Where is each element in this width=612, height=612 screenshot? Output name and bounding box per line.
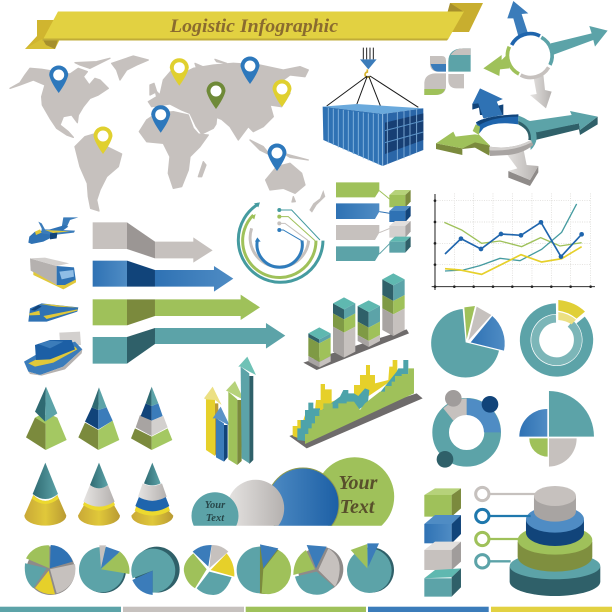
label ring: blue (476, 509, 531, 523)
series: yellow (293, 360, 397, 440)
label: teal (336, 237, 411, 261)
quadrant chart (519, 391, 594, 467)
dot: gray (445, 390, 462, 407)
series: blue (445, 220, 584, 259)
exploded pie chart (431, 306, 505, 378)
map islands: japan (309, 190, 325, 213)
pie 1 (25, 545, 76, 595)
ring labels and stacked cylinder (476, 486, 600, 596)
arrow: 3D teal (518, 111, 598, 140)
concentric arc chart (238, 202, 323, 282)
bubble: teal: Your (205, 500, 226, 511)
pin: russia (240, 56, 260, 84)
dot: dark teal (437, 451, 453, 468)
arrow: 3D blue (472, 88, 503, 118)
tier: green (518, 525, 592, 572)
label ring: gray (476, 487, 537, 501)
pin: oceania (268, 144, 286, 171)
label: gray (336, 221, 411, 240)
pin: europe (170, 58, 189, 86)
cone 2 (78, 463, 120, 526)
icon: train (28, 303, 78, 322)
ring segments (473, 114, 537, 156)
arrow: gray (93, 222, 213, 263)
icon: petals (424, 48, 471, 95)
bar 3 (358, 300, 380, 347)
tier: blue (526, 506, 584, 546)
series: green (444, 222, 582, 247)
small 3D pies row, right (293, 543, 394, 595)
bubble: teal: Text (206, 513, 225, 524)
cube: gray (424, 542, 461, 570)
tier: gray (534, 486, 576, 522)
bar 1 (308, 327, 331, 367)
bubble: blue (272, 468, 340, 526)
pie 5 (237, 544, 291, 594)
world map (10, 56, 308, 211)
map pins (49, 56, 292, 171)
bubble: green (322, 457, 394, 526)
arrow: blue (213, 407, 230, 462)
label: blue (336, 203, 411, 222)
bar 2 (333, 297, 355, 358)
icon: container on crane hook (323, 48, 423, 166)
arc: teal (238, 202, 323, 282)
pie 3 (131, 547, 180, 595)
rising 3D arrows (204, 357, 256, 465)
arrow: green (226, 381, 244, 465)
bubble: green: Text (340, 496, 376, 518)
pin: central asia (206, 82, 226, 109)
series: green (305, 368, 414, 444)
arc: green (243, 214, 316, 278)
tier: bottom teal (510, 553, 600, 596)
label ring: green (476, 532, 519, 546)
bar 4 (382, 273, 405, 336)
stepped area chart (289, 360, 423, 448)
cone 3 (131, 463, 173, 526)
cone 1 (24, 463, 66, 526)
icon: ship (24, 332, 82, 376)
pyramid 2 (78, 387, 119, 450)
arrow: 3D green (436, 132, 490, 156)
isometric bar chart (303, 273, 409, 370)
arrow: gray down (530, 74, 552, 108)
arrow: blue up (507, 1, 528, 36)
pie 6 (293, 545, 343, 595)
text bubbles (192, 457, 394, 526)
pin: east asia (272, 80, 292, 107)
double ring chart (525, 300, 588, 371)
stepped arrows (93, 222, 285, 364)
cube: teal (424, 568, 461, 597)
label: green (336, 182, 411, 207)
stacked cubes (424, 488, 461, 597)
3D ring with four arrows (436, 88, 598, 186)
label boxes with cubes (336, 182, 411, 261)
bottom colour bar (0, 607, 612, 612)
line chart (432, 193, 595, 290)
series: teal (445, 204, 577, 271)
pin: africa (151, 105, 170, 133)
pin: north america (49, 66, 68, 93)
pie 7 (347, 543, 394, 593)
cones (24, 463, 173, 526)
arrow: yellow (204, 387, 222, 456)
arc: blue (255, 228, 302, 267)
arrow: teal (238, 357, 256, 464)
dot: dark blue (482, 396, 498, 413)
donut with dots (437, 390, 501, 468)
cube: green (424, 488, 461, 517)
small 3D pies row (25, 544, 291, 595)
arrow: teal (93, 323, 285, 364)
arrow: green left (483, 55, 509, 76)
arrow: teal right (551, 26, 608, 55)
series: yellow (445, 247, 582, 274)
pin: south america (94, 126, 112, 154)
flat ring with four arrows (483, 1, 608, 108)
pyramid 1 (26, 387, 67, 450)
arrow: blue (93, 261, 233, 292)
pyramid 3 (131, 387, 172, 450)
label ring: teal (476, 555, 511, 568)
arrow: green (93, 295, 260, 325)
title text: Logistic Infographic (169, 16, 339, 37)
pie 4 (184, 545, 234, 595)
series: teal (297, 360, 408, 442)
bubble: gray (230, 480, 284, 526)
arrow: 3D gray (505, 148, 538, 186)
arc: gray (250, 221, 309, 267)
cube: blue (424, 515, 461, 543)
bubble: teal (192, 492, 238, 526)
title ribbon (25, 3, 483, 49)
ring segments (507, 34, 552, 78)
icon: truck (30, 258, 76, 289)
icon: plane (28, 217, 78, 244)
pyramids (26, 387, 172, 450)
bubble: green: Your (339, 472, 378, 494)
pie 2 (79, 545, 129, 593)
